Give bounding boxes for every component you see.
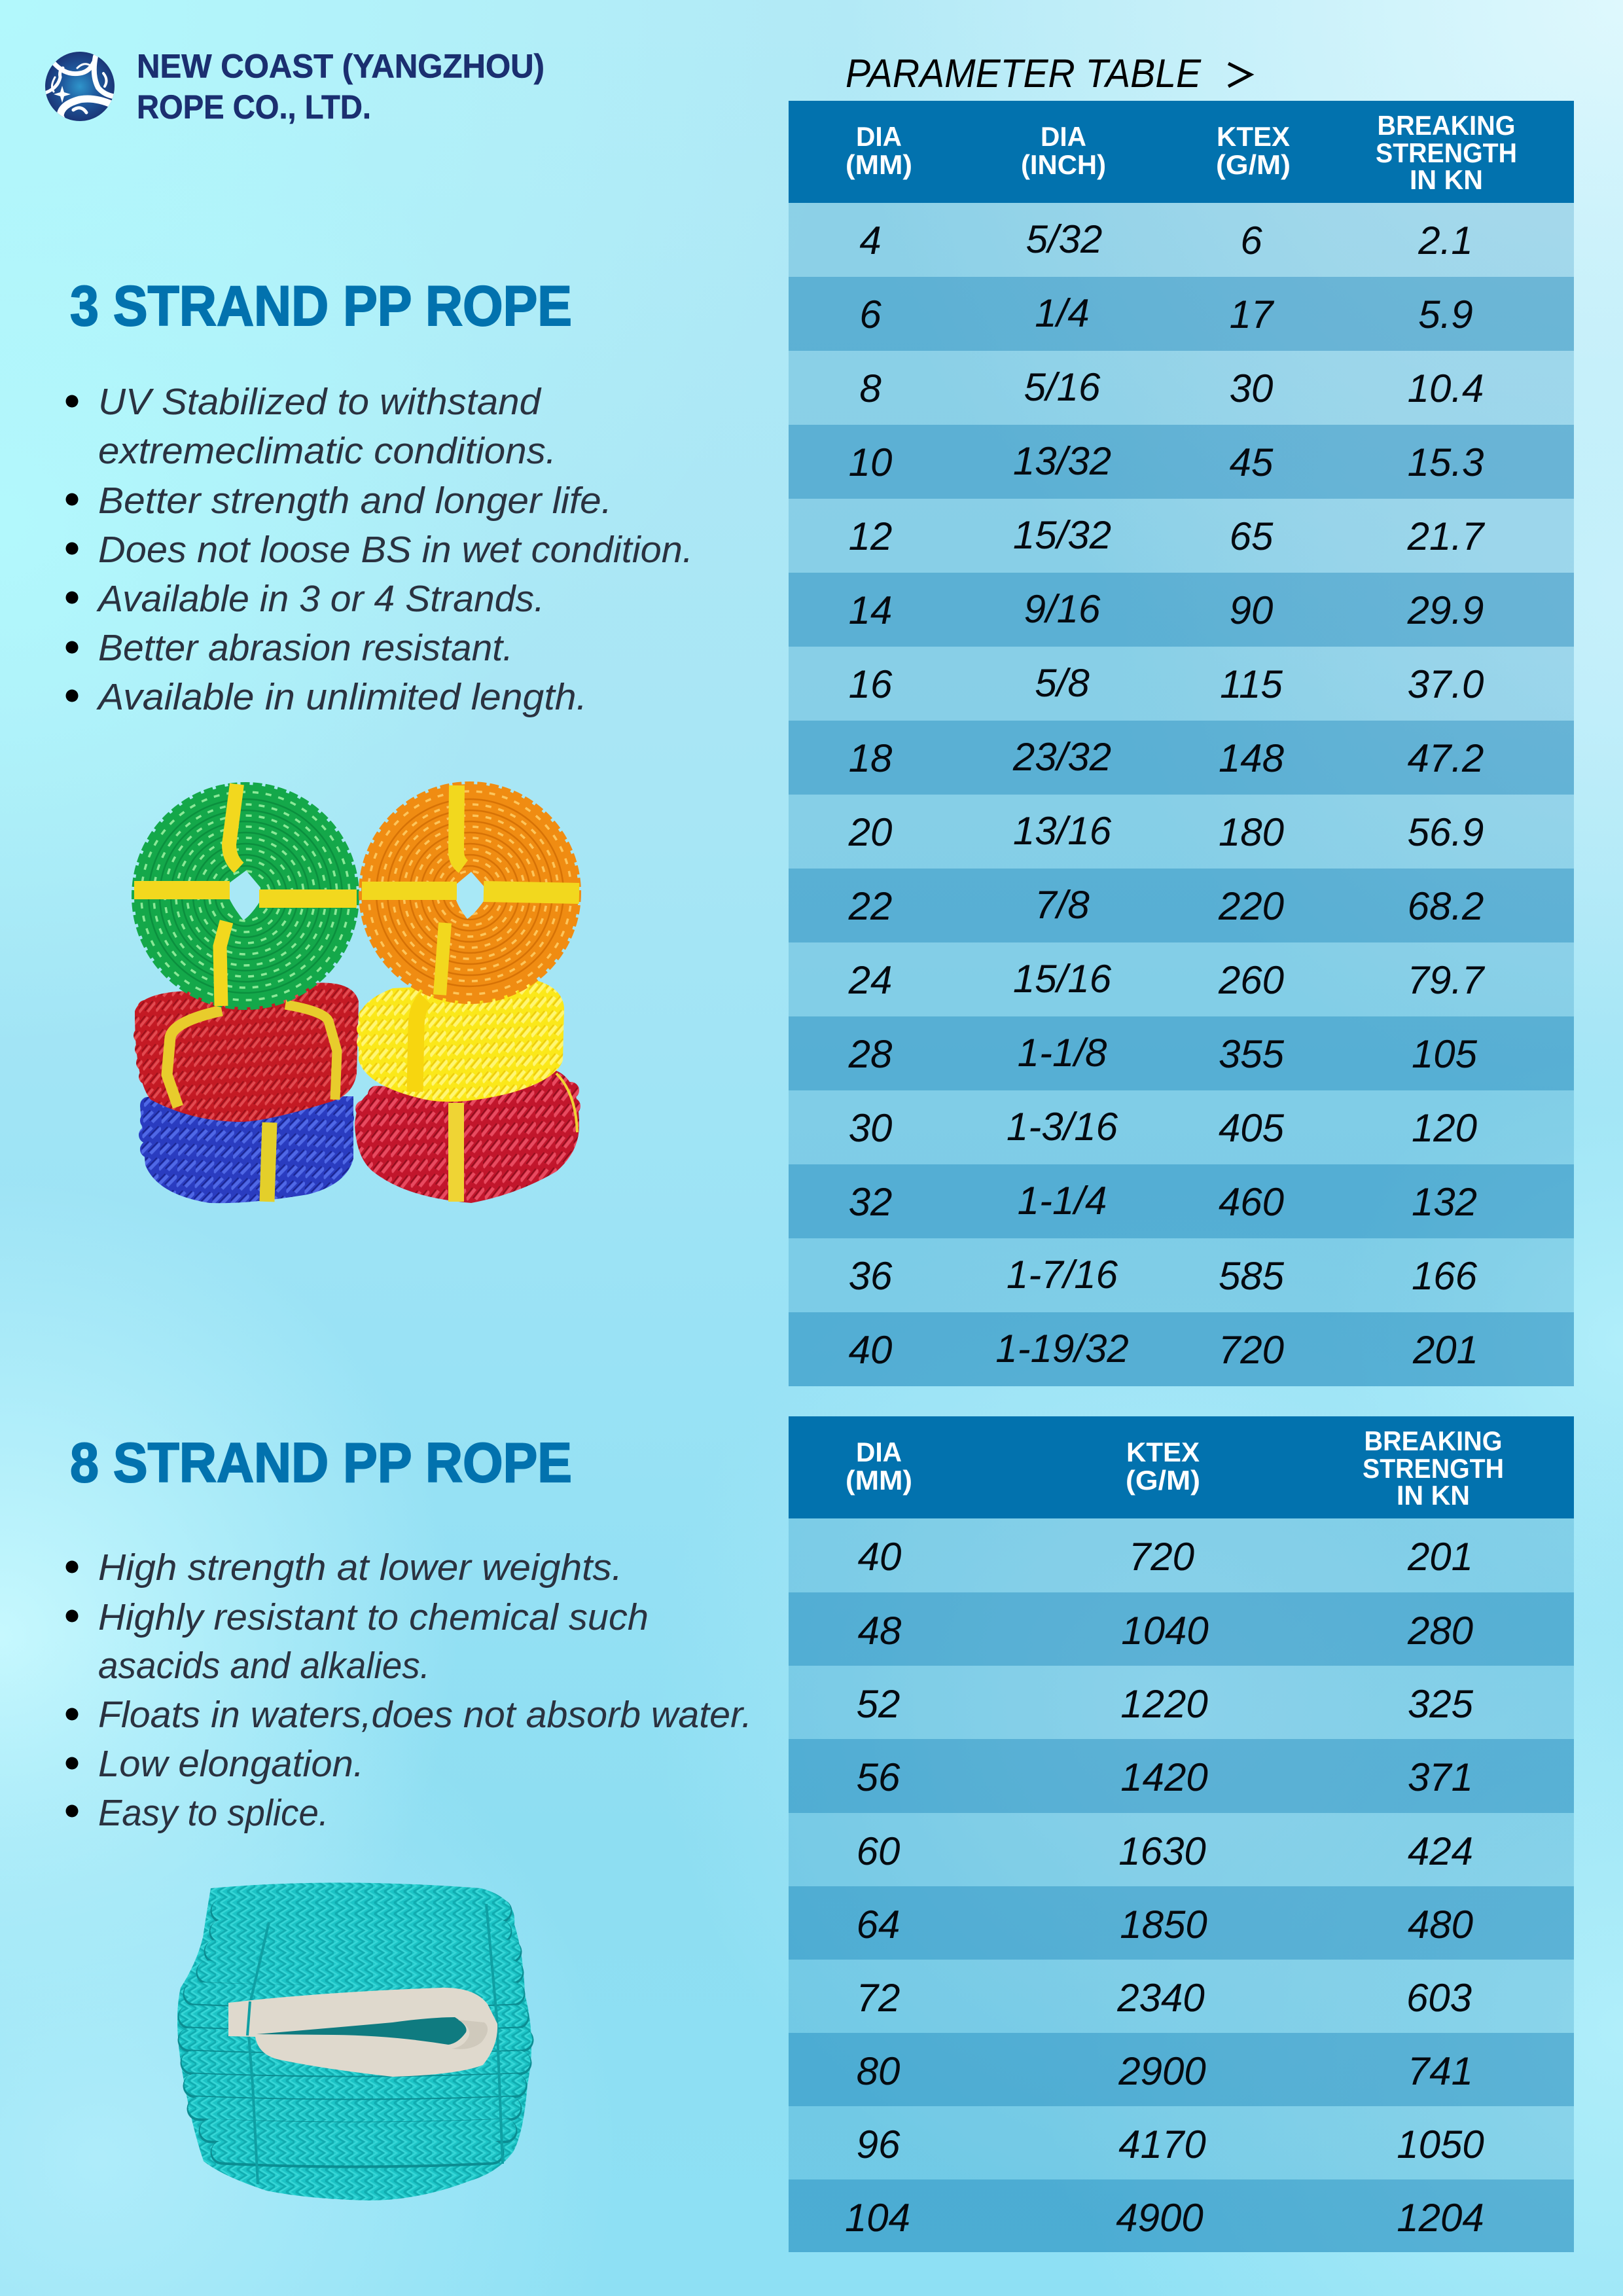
table rows: 80 [857, 2049, 900, 2093]
table header: BREAKING [1364, 1426, 1503, 1456]
table rows: 32 [849, 1180, 892, 1224]
table: 8 strand parameters [789, 1416, 1574, 2252]
table rows: 14 [849, 588, 892, 632]
table header: IN KN [1397, 1480, 1470, 1511]
table rows: 72 [857, 1976, 900, 2020]
table rows: 132 [1412, 1180, 1477, 1224]
feature list: 3 strand: Better strength and longer life. [98, 480, 612, 522]
table rows: 96 [857, 2123, 901, 2166]
company name: ROPE CO., LTD. [137, 88, 371, 126]
table rows: 20 [848, 810, 892, 854]
company name [137, 47, 544, 126]
table rows: 30 [849, 1106, 892, 1150]
table rows: 1420 [1120, 1755, 1208, 1799]
table rows: 1-3/16 [1007, 1105, 1118, 1149]
feature list: 8 strand: Highly resistant to chemical such [98, 1596, 649, 1638]
feature list: 3 strand: extremeclimatic conditions. [98, 430, 556, 472]
table rows [789, 1518, 1574, 2252]
table rows: 29.9 [1407, 588, 1484, 632]
table rows: 5/8 [1035, 661, 1090, 705]
table header: KTEX [1126, 1437, 1200, 1467]
table rows: 13/16 [1013, 809, 1112, 853]
table rows: 36 [849, 1254, 893, 1298]
table rows: 424 [1408, 1829, 1473, 1873]
table rows: 480 [1408, 1903, 1473, 1946]
table rows: 405 [1219, 1106, 1285, 1150]
table rows: 585 [1219, 1254, 1285, 1298]
table rows: 741 [1408, 2049, 1473, 2093]
arrow [1228, 63, 1251, 86]
table header: DIA [856, 1437, 902, 1467]
table rows: 17 [1230, 293, 1275, 336]
coil: lower blue left [140, 1096, 353, 1203]
table rows: 180 [1219, 810, 1284, 854]
table rows: 16 [849, 662, 893, 706]
table rows: 45 [1230, 440, 1274, 484]
table header: IN KN [1410, 164, 1483, 195]
table rows: 65 [1230, 514, 1274, 558]
table rows: 4900 [1116, 2196, 1204, 2240]
table rows: 104 [845, 2196, 910, 2240]
rope layers [190, 1910, 522, 2156]
coil: lower red right [355, 1071, 579, 1203]
table rows: 13/32 [1013, 439, 1111, 483]
table rows: 220 [1218, 884, 1284, 928]
canvas protective sleeve [228, 1988, 497, 2077]
table rows: 720 [1129, 1535, 1194, 1579]
table rows: 56 [857, 1755, 901, 1799]
feature list: 3 strand: Available in 3 or 4 Strands. [96, 578, 544, 620]
heading: 3 strand pp rope: 3 STRAND PP ROPE [70, 275, 572, 338]
table header: DIA [1041, 121, 1086, 152]
table rows: 68.2 [1408, 884, 1484, 928]
table header: STRENGTH [1376, 137, 1517, 168]
table rows: 37.0 [1408, 662, 1484, 706]
table rows: 40 [858, 1535, 901, 1579]
table rows: 15/16 [1013, 957, 1112, 1001]
table rows: 10.4 [1408, 367, 1484, 410]
table rows: 22 [848, 884, 892, 928]
table rows: 47.2 [1408, 736, 1484, 780]
table header: KTEX [1217, 121, 1290, 152]
table rows: 23/32 [1012, 735, 1111, 779]
table rows: 166 [1412, 1254, 1478, 1298]
table rows: 1630 [1118, 1829, 1206, 1873]
table header [789, 1416, 1574, 1518]
table rows: 5/32 [1026, 217, 1102, 261]
table rows: 1220 [1120, 1682, 1208, 1726]
feature list: 8 strand: Low elongation. [98, 1743, 364, 1785]
table rows: 7/8 [1035, 883, 1090, 927]
company logo [45, 52, 115, 121]
table header: (INCH) [1021, 149, 1106, 180]
table header [789, 101, 1574, 203]
table rows: 4 [859, 219, 882, 262]
feature list: 8 strand: asacids and alkalies. [98, 1645, 430, 1687]
table rows: 1850 [1120, 1903, 1207, 1946]
table rows: 6 [1240, 219, 1262, 262]
table rows [789, 203, 1574, 1386]
table rows: 8 [859, 367, 882, 410]
table rows: 60 [857, 1829, 900, 1873]
company name: NEW COAST (YANGZHOU) [137, 47, 544, 85]
table rows: 201 [1407, 1535, 1473, 1579]
table rows: 720 [1219, 1328, 1284, 1372]
table rows: 1050 [1397, 2123, 1484, 2166]
table rows: 9/16 [1024, 587, 1101, 631]
table rows: 30 [1230, 367, 1273, 410]
feature list: 3 strand: Available in unlimited length. [96, 676, 587, 718]
table rows: 10 [849, 440, 892, 484]
table rows: 40 [849, 1328, 892, 1372]
table rows: 460 [1219, 1180, 1284, 1224]
table rows: 90 [1230, 588, 1273, 632]
table rows: 1040 [1121, 1609, 1209, 1653]
table header: BREAKING [1377, 110, 1516, 141]
table rows: 79.7 [1408, 958, 1486, 1002]
table rows: 28 [848, 1032, 893, 1076]
table rows: 52 [857, 1682, 900, 1726]
table rows: 1/4 [1035, 291, 1090, 335]
table rows: 4170 [1118, 2123, 1206, 2166]
table header: (G/M) [1126, 1465, 1200, 1496]
feature list: 3 strand: UV Stabilized to withstand [98, 381, 542, 423]
feature list: 8 strand: Floats in waters,does not absorb water. [98, 1694, 752, 1736]
coil: top orange [361, 783, 579, 1002]
feature list: 3 strand [65, 381, 693, 718]
table rows: 6 [859, 293, 882, 336]
table header: (MM) [846, 1465, 912, 1496]
table rows: 325 [1408, 1682, 1474, 1726]
table: 3 strand parameters [789, 101, 1574, 1386]
table rows: 48 [858, 1609, 902, 1653]
coil: middle yellow right [359, 980, 564, 1102]
table header: STRENGTH [1363, 1453, 1504, 1484]
table rows: 371 [1408, 1755, 1473, 1799]
table rows: 603 [1406, 1976, 1472, 2020]
table rows: 1-1/4 [1018, 1179, 1107, 1223]
product photo: stacked coloured rope coils [134, 783, 579, 1203]
table rows: 64 [857, 1903, 900, 1946]
feature list: 8 strand: High strength at lower weights. [98, 1547, 622, 1588]
table rows: 15.3 [1408, 440, 1484, 484]
table rows: 24 [848, 958, 892, 1002]
table header: DIA [856, 121, 902, 152]
table rows: 15/32 [1013, 513, 1111, 557]
table rows: 18 [849, 736, 893, 780]
table rows: 5.9 [1418, 293, 1473, 336]
table rows: 1-1/8 [1018, 1031, 1107, 1075]
table rows: 355 [1219, 1032, 1285, 1076]
table rows: 2.1 [1418, 219, 1473, 262]
table rows: 120 [1412, 1106, 1477, 1150]
table header: (MM) [846, 149, 912, 180]
table rows: 115 [1220, 662, 1283, 706]
table rows: 56.9 [1408, 810, 1484, 854]
table rows: 201 [1412, 1328, 1478, 1372]
table header: (G/M) [1216, 149, 1291, 180]
table rows: 5/16 [1024, 365, 1101, 409]
coil: top green [134, 784, 357, 1008]
table rows: 1204 [1397, 2196, 1484, 2240]
table rows: 260 [1218, 958, 1284, 1002]
table rows: 105 [1412, 1032, 1478, 1076]
heading: 8 strand pp rope: 8 STRAND PP ROPE [70, 1432, 572, 1494]
table rows: 1-7/16 [1007, 1253, 1118, 1297]
parameter table title: PARAMETER TABLE [846, 51, 1202, 96]
table rows: 2900 [1118, 2049, 1206, 2093]
feature list: 3 strand: Better abrasion resistant. [98, 627, 513, 669]
table rows: 21.7 [1407, 514, 1486, 558]
table rows: 12 [849, 514, 892, 558]
feature list: 8 strand [65, 1547, 752, 1834]
feature list: 3 strand: Does not loose BS in wet condition. [98, 529, 693, 571]
table rows: 1-19/32 [995, 1327, 1129, 1371]
coil: middle red left [135, 983, 359, 1122]
feature list: 8 strand: Easy to splice. [98, 1792, 329, 1834]
table rows: 280 [1407, 1609, 1473, 1653]
coil silhouette [177, 1882, 531, 2200]
table rows: 2340 [1116, 1976, 1205, 2020]
product photo: teal 8 strand rope coil [177, 1882, 531, 2200]
table rows: 148 [1219, 736, 1285, 780]
